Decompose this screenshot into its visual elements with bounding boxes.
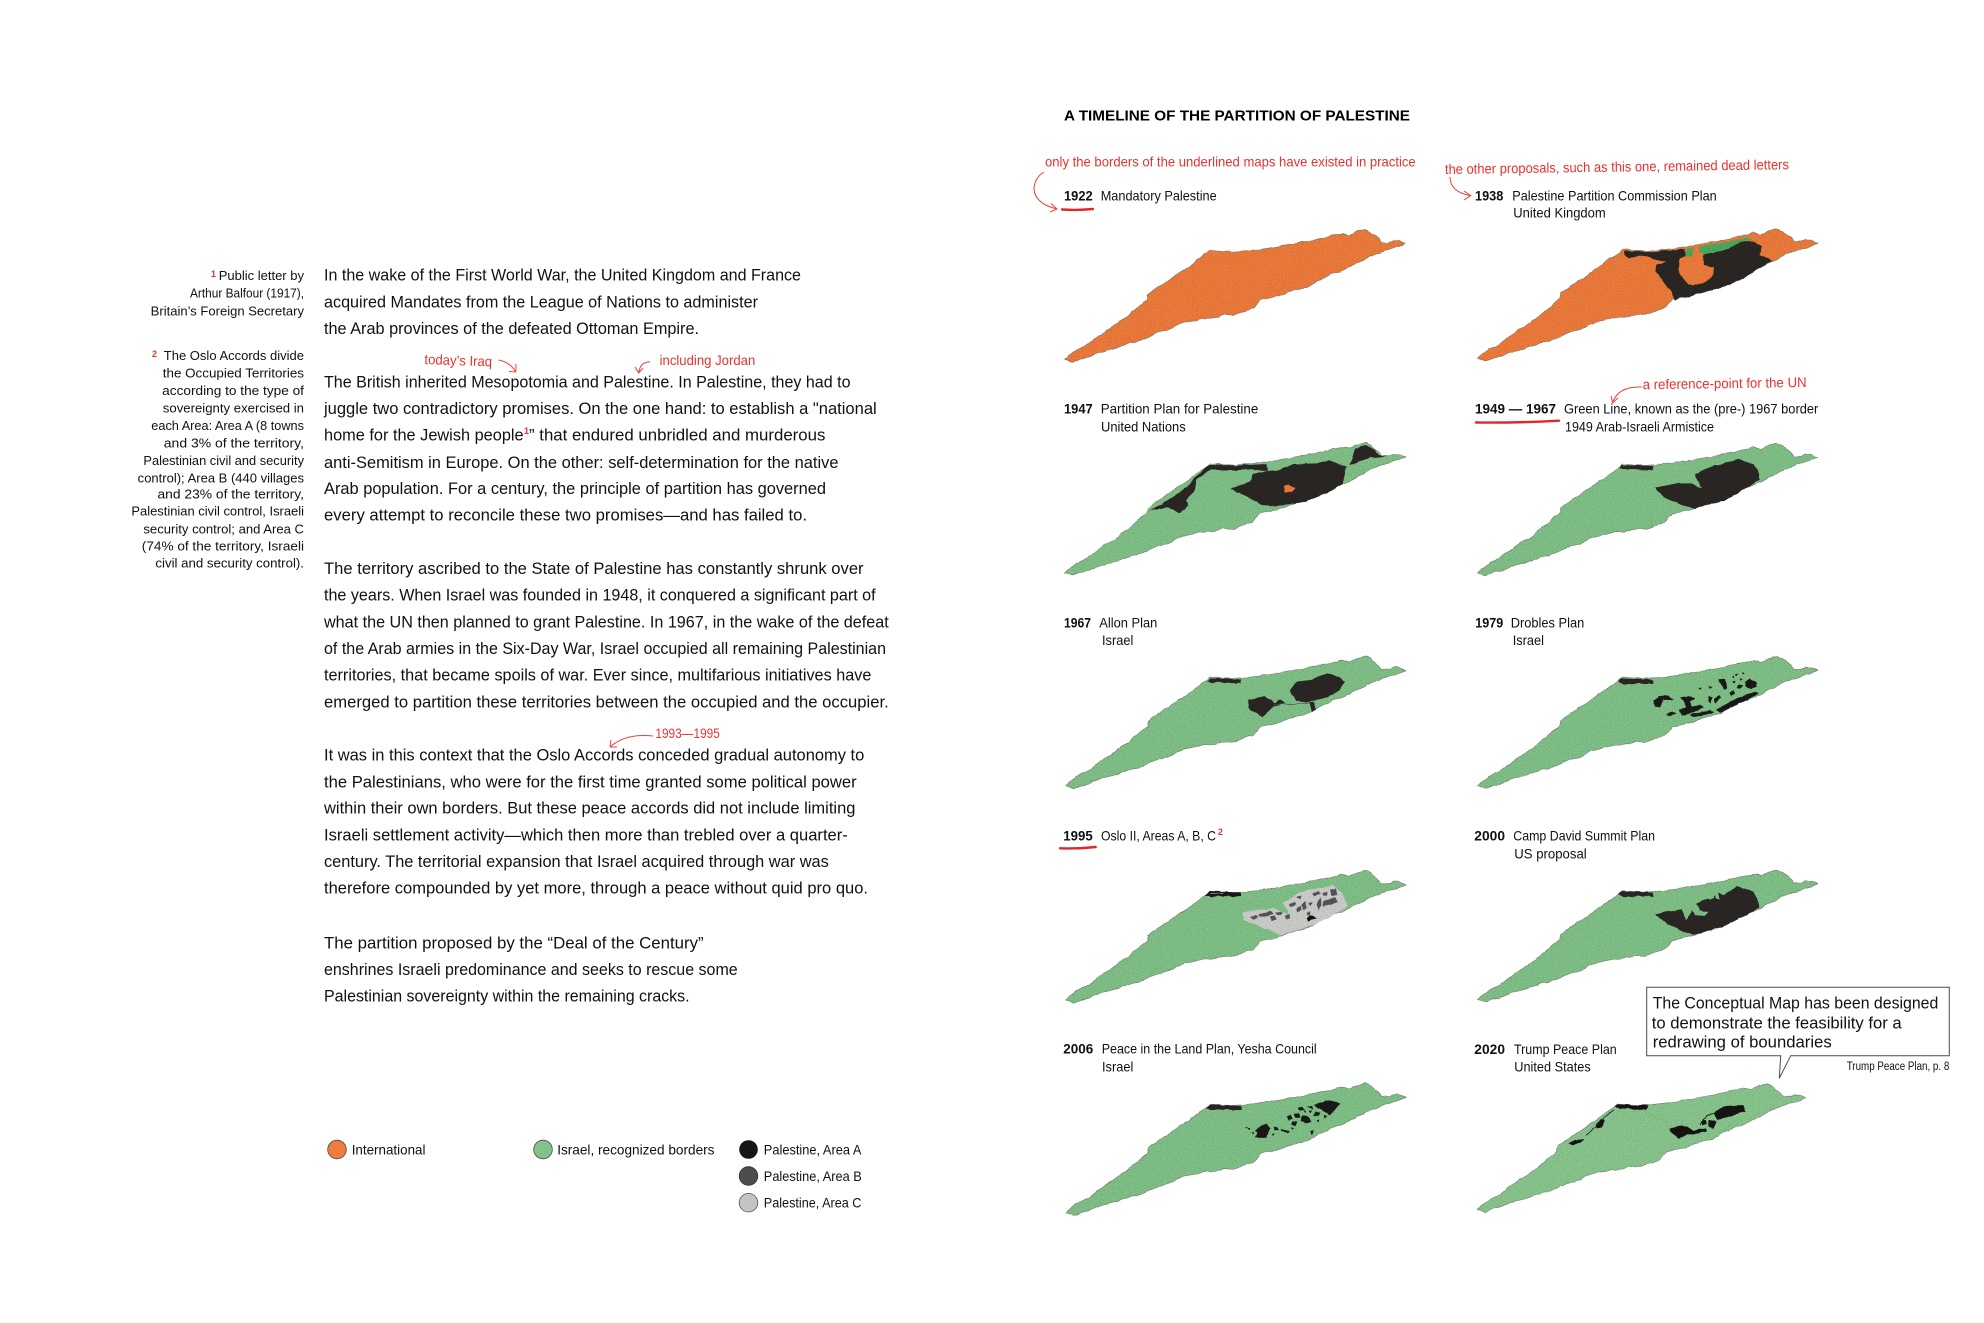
label: 1995: 2 [1218, 827, 1223, 837]
paragraph 4 [323, 746, 868, 898]
callout: Conceptual Map quote: to demonstrate the feasibility for a [1652, 1013, 1902, 1032]
panel: 1949-1967 Green Line [1475, 400, 1819, 575]
paragraph 1: acquired Mandates from the League of Nations to administer [324, 293, 758, 312]
label: 2000: US proposal [1514, 845, 1587, 861]
map: 1979 [1477, 656, 1818, 788]
annotation: 1993-1995 [610, 725, 720, 747]
paragraph 5: Palestinian sovereignty within the remaining cracks. [324, 987, 690, 1006]
label: 2020: 2020 [1474, 1041, 1505, 1057]
footnote 2: security control; and Area C [143, 521, 304, 536]
paragraph 2: 1 [524, 426, 529, 436]
label: 1949-1967: Green Line, known as the (pre-) 1967 border [1564, 400, 1819, 416]
paragraph 5: The partition proposed by the “Deal of the Century” [324, 933, 704, 952]
label: 1949-1967: 1949 — 1967 [1475, 400, 1556, 416]
legend: Palestine, Area A: Palestine, Area A [764, 1141, 862, 1157]
map: 2020 [1477, 1084, 1806, 1212]
paragraph 4: therefore compounded by yet more, through a peace without quid pro quo. [324, 879, 868, 898]
label: 1938: Palestine Partition Commission Plan [1512, 188, 1717, 204]
annotation: today's Iraq: today’s Iraq [424, 351, 492, 369]
label: 1979: Drobles Plan [1511, 614, 1584, 630]
label: 1922 [1062, 188, 1217, 210]
annotation: including Jordan: including Jordan [660, 352, 755, 368]
label: 1949-1967 [1475, 400, 1819, 435]
label: 1949-1967: 1949 Arab-Israeli Armistice [1565, 419, 1714, 435]
label: 1967: Israel [1102, 632, 1133, 648]
legend: Israel, recognized borders: Israel, recognized borders [557, 1141, 714, 1157]
label: 1947: United Nations [1101, 419, 1186, 435]
main text column [323, 266, 889, 1006]
paragraph 5 [324, 933, 738, 1006]
legend: Palestine, Area C [739, 1193, 861, 1212]
paragraph 4: Israeli settlement activity—which then more than trebled over a quarter- [324, 826, 848, 845]
footnote 2: and 3% of the territory, [164, 435, 304, 450]
paragraph 3: territories, that became spoils of war. Ever since, multifarious initiatives have [324, 666, 871, 685]
map: 2000 [1477, 870, 1818, 1002]
panel: 2006 Peace in the Land Plan [1063, 1040, 1406, 1215]
legend: Palestine, Area C: Palestine, Area C [764, 1195, 861, 1211]
label: 1995: 1995 [1063, 828, 1093, 844]
panel: 2000 Camp David Summit Plan [1474, 828, 1818, 1002]
paragraph 2: ” that endured unbridled and murderous [529, 426, 825, 445]
annotation: dead letters note [1445, 156, 1789, 200]
legend: Palestine, Area B: Palestine, Area B [764, 1168, 862, 1184]
annotation: 1993-1995: 1993—1995 [655, 725, 720, 741]
label: 1938: 1938 [1475, 188, 1503, 204]
paragraph 4: It was in this context that the Oslo Accords conceded gradual autonomy to [324, 746, 864, 765]
label: 1979: Israel [1513, 632, 1544, 648]
callout: Conceptual Map quote [1647, 987, 1949, 1078]
paragraph 4: the Palestinians, who were for the first time granted some political power [324, 772, 857, 791]
footnote 1: Public letter by [219, 268, 304, 283]
panel: 1947 Partition Plan for Palestine [1064, 400, 1406, 575]
label: 2020 [1474, 1041, 1617, 1075]
footnote 1 [151, 268, 304, 319]
panel: 1967 Allon Plan [1064, 614, 1406, 788]
footnote 2: sovereignty exercised in [163, 401, 304, 416]
label: 1947 [1064, 400, 1258, 435]
label: 1967 [1064, 614, 1157, 648]
label: 1947: 1947 [1064, 400, 1093, 416]
label: 1979 [1475, 614, 1584, 648]
legend: International [328, 1140, 426, 1159]
label: 2000: Camp David Summit Plan [1513, 828, 1655, 844]
label: 1947: Partition Plan for Palestine [1101, 400, 1258, 416]
paragraph 4: century. The territorial expansion that Israel acquired through war was [324, 852, 829, 871]
paragraph 2: every attempt to reconcile these two promises—and has failed to. [324, 506, 807, 525]
legend [328, 1140, 862, 1212]
title: A TIMELINE OF THE PARTITION OF PALESTINE [1064, 108, 1410, 125]
annotation: including Jordan [635, 352, 755, 373]
paragraph 3 [323, 559, 889, 711]
label: 1922: 1922 [1064, 188, 1093, 204]
label: 2000 [1474, 828, 1655, 861]
legend: Palestine, Area B [739, 1167, 862, 1185]
footnotes column [131, 268, 305, 571]
paragraph 3: of the Arab armies in the Six-Day War, Israel occupied all remaining Palestinian [324, 639, 886, 658]
paragraph 1: the Arab provinces of the defeated Ottoman Empire. [324, 319, 699, 338]
footnote 1: Arthur Balfour (1917), [190, 285, 304, 300]
label: 1995: Oslo II, Areas A, B, C [1101, 828, 1216, 844]
footnote 2: Palestinian civil control, Israeli [131, 504, 304, 519]
panel: 1922 Mandatory Palestine [1062, 188, 1406, 362]
label: 1967: 1967 [1064, 614, 1091, 630]
callout: Conceptual Map quote: redrawing of boundaries [1653, 1033, 1832, 1052]
annotation: underlined maps note [1034, 154, 1416, 212]
footnote 2: (74% of the territory, Israeli [142, 539, 304, 554]
paragraph 3: emerged to partition these territories between the occupied and the occupier. [324, 692, 889, 711]
footnote 2: 2 [152, 349, 157, 359]
paragraph 3: what the UN then planned to grant Palestine. In 1967, in the wake of the defeat [323, 612, 889, 631]
footnote 2: each Area: Area A (8 towns [151, 418, 304, 433]
label: 1938: United Kingdom [1513, 205, 1606, 221]
label: 1995 [1060, 827, 1223, 848]
label: 1922: Mandatory Palestine [1101, 188, 1217, 204]
footnote 1: 1 [211, 269, 216, 279]
map: 1922 [1065, 229, 1406, 362]
panel: 1995 Oslo II [1060, 827, 1406, 1003]
footnote 2: The Oslo Accords divide [164, 348, 304, 363]
label: 2006 [1063, 1040, 1317, 1075]
paragraph 2: juggle two contradictory promises. On the one hand: to establish a "national [323, 399, 877, 418]
map: 1947 [1065, 443, 1406, 575]
legend: International: International [352, 1141, 426, 1157]
annotation: reference point for the UN: a reference-point for the UN [1643, 374, 1807, 392]
footnote 2: according to the type of [162, 383, 304, 398]
paragraph 1 [324, 266, 801, 338]
annotation: reference point for the UN [1611, 374, 1807, 403]
paragraph 2 [323, 373, 877, 525]
paragraph 5: enshrines Israeli predominance and seeks to rescue some [324, 960, 738, 979]
map: 1967 [1065, 656, 1406, 788]
footnote 1: Britain’s Foreign Secretary [151, 304, 304, 319]
label: 2006: Israel [1102, 1059, 1133, 1075]
annotation: today's Iraq [424, 351, 516, 372]
paragraph 2: The British inherited Mesopotomia and Palestine. In Palestine, they had to [324, 373, 850, 392]
panel: 1938 Palestine Partition Commission Plan [1475, 188, 1818, 361]
label: 2000: 2000 [1474, 828, 1505, 844]
map: 2006 [1065, 1083, 1406, 1215]
map: 1995 [1065, 870, 1406, 1003]
map: 1949-1967 [1477, 443, 1818, 575]
panel: 1979 Drobles Plan [1475, 614, 1818, 788]
label: 1967: Allon Plan [1099, 614, 1157, 630]
footnote 2: the Occupied Territories [163, 365, 305, 380]
label: 1979: 1979 [1475, 614, 1503, 630]
legend: Palestine, Area A [739, 1140, 862, 1159]
panel: 2020 Trump Peace Plan [1474, 1041, 1806, 1212]
footnote 2: civil and security control). [155, 556, 304, 571]
label: 1938 [1475, 188, 1717, 221]
label: 2020: Trump Peace Plan [1514, 1041, 1617, 1057]
paragraph 2: Arab population. For a century, the principle of partition has governed [324, 479, 826, 498]
callout source: Trump Peace Plan, p. 8 [1847, 1061, 1949, 1073]
paragraph 2: anti-Semitism in Europe. On the other: self-determination for the native [324, 453, 838, 472]
footnote 2 [131, 348, 305, 571]
paragraph 2: home for the Jewish people [324, 426, 524, 445]
footnote 2: and 23% of the territory, [158, 486, 304, 501]
annotation: underlined maps note: only the borders of the underlined maps have existed in practice [1045, 154, 1416, 170]
footnote 2: control); Area B (440 villages [138, 470, 304, 485]
paragraph 3: the years. When Israel was founded in 1948, it conquered a significant part of [324, 586, 876, 605]
footnote 2: Palestinian civil and security [143, 453, 304, 468]
label: 2020: United States [1514, 1059, 1591, 1075]
label: 2006: Peace in the Land Plan, Yesha Council [1102, 1040, 1317, 1056]
label: 2006: 2006 [1063, 1040, 1093, 1056]
paragraph 4: within their own borders. But these peace accords did not include limiting [323, 799, 855, 818]
paragraph 3: The territory ascribed to the State of Palestine has constantly shrunk over [324, 559, 864, 578]
map: 1938 [1477, 229, 1818, 361]
callout: Conceptual Map quote: The Conceptual Map has been designed [1653, 993, 1938, 1012]
annotation: dead letters note: the other proposals, such as this one, remained dead letters [1445, 156, 1789, 177]
paragraph 1: In the wake of the First World War, the United Kingdom and France [324, 266, 801, 285]
